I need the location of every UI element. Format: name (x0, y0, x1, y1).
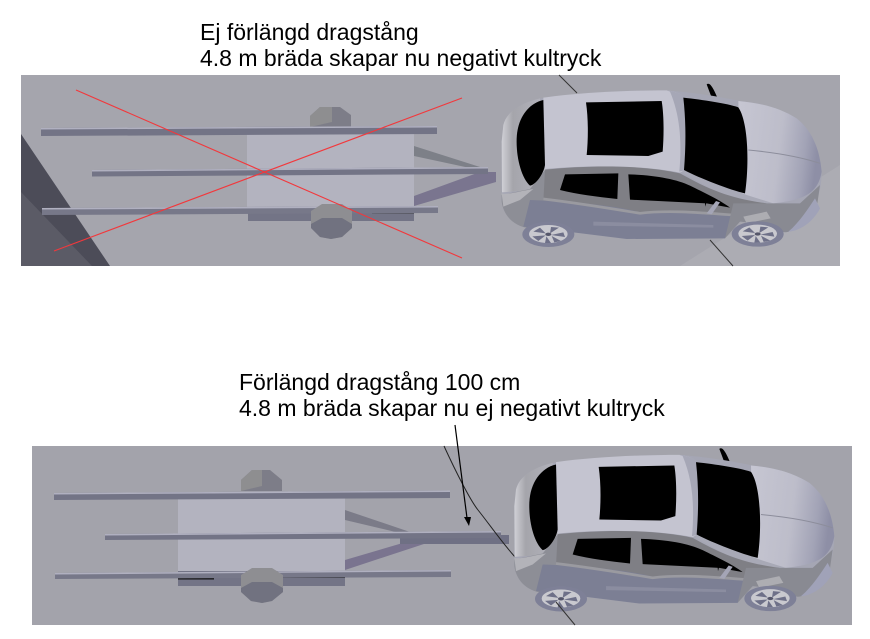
cable below car (710, 240, 733, 266)
bottom wheel (311, 204, 352, 239)
heading: bottom scenario: 4.8 m bräda skapar nu ej negativt kultryck (239, 395, 665, 421)
floor highlight (680, 165, 840, 266)
heading: top scenario: Ej förlängd dragstång (200, 19, 419, 45)
middle board (105, 531, 501, 540)
upper board (54, 490, 450, 500)
trailer bed (178, 498, 345, 571)
red cross (54, 90, 462, 258)
background shadow wedge (21, 134, 110, 266)
top wheel (310, 107, 351, 127)
heading: top scenario: 4.8 m bräda skapar nu negativt kultryck (200, 45, 602, 71)
extended drawbar (400, 535, 509, 544)
lower board (42, 206, 438, 215)
cable below car (556, 602, 575, 625)
trailer bed (247, 134, 414, 207)
middle board (92, 167, 488, 176)
upper board (41, 126, 437, 136)
top wheel (241, 470, 282, 491)
cable to car (444, 446, 515, 557)
car (502, 84, 822, 247)
trailer (41, 107, 496, 239)
bottom wheel (241, 568, 283, 603)
car (514, 448, 834, 611)
cable above car (559, 75, 577, 93)
trailer (54, 470, 509, 603)
panel: without extended drawbar (21, 75, 840, 266)
heading: bottom scenario: Förlängd dragstång 100 cm (239, 369, 520, 395)
lower board (55, 570, 451, 579)
arrow to drawbar (455, 425, 471, 526)
trailer drawbar frame (414, 146, 480, 168)
trailer drawbar frame (345, 510, 410, 533)
panel: with extended drawbar (32, 446, 852, 625)
